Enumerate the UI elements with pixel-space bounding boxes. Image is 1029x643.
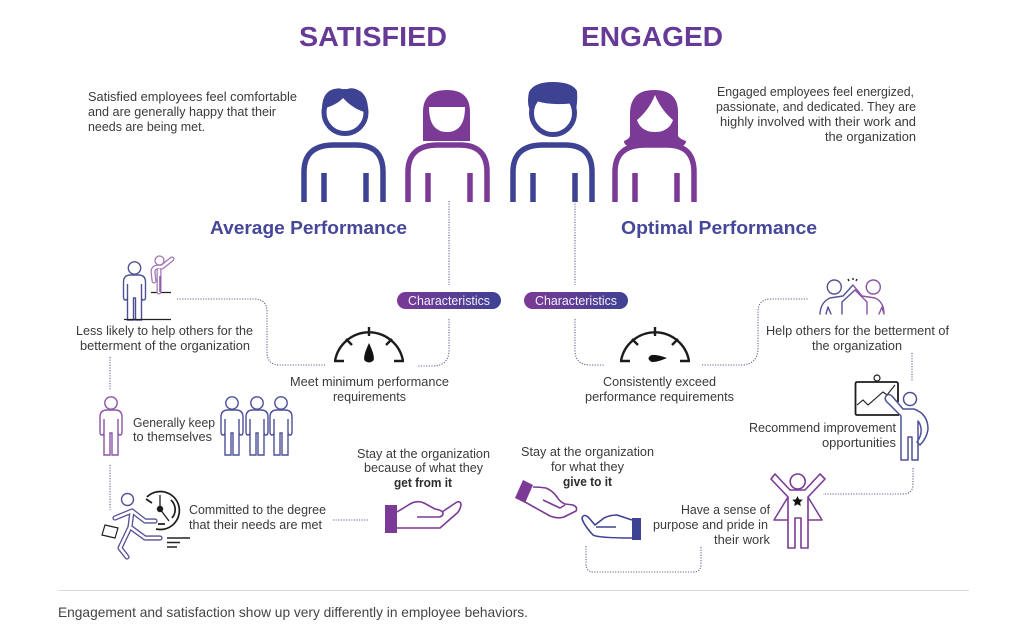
text: stay because of what they get xyxy=(357,447,490,490)
text: recommend improvement: Recommend improvement xyxy=(749,421,897,435)
heading: average performance: Average Performance xyxy=(210,218,407,238)
heading: optimal performance: Optimal Performance xyxy=(621,218,817,238)
icon: group of three people xyxy=(221,397,292,455)
text block: engaged description: highly involved with their work and xyxy=(720,115,916,129)
text block: satisfied description: Satisfied employees feel comfortable xyxy=(88,90,297,104)
icon: satisfied woman xyxy=(408,90,487,202)
text: less likely to help others: Less likely to help others for the xyxy=(76,324,253,338)
text: stay for what they give: give to it xyxy=(563,475,613,489)
text: meet minimum performance: Meet minimum performance xyxy=(290,375,449,389)
text: stay for what they give: Stay at the organization xyxy=(521,445,654,459)
pill: satisfied characteristics xyxy=(397,292,501,309)
text: stay because of what they get: Stay at the organization xyxy=(357,447,490,461)
text: less likely to help others xyxy=(76,324,253,353)
text: sense of purpose: their work xyxy=(714,533,771,547)
text block: satisfied description: needs are being met. xyxy=(88,120,205,134)
text: less likely to help others: betterment of the organization xyxy=(80,339,250,353)
icon: high five xyxy=(820,278,884,314)
text: consistently exceed xyxy=(585,375,734,404)
icon: open hand xyxy=(582,515,641,540)
connector: satisfied person to characteristics xyxy=(448,201,450,285)
text: consistently exceed: Consistently exceed xyxy=(603,375,716,389)
pill: engaged characteristics: Characteristics xyxy=(535,294,617,308)
text block: engaged description: the organization xyxy=(825,130,916,144)
icon: gauge minimum xyxy=(334,327,404,362)
text: help others xyxy=(766,324,950,353)
icon: giving hand xyxy=(515,480,577,518)
text: stay for what they give xyxy=(521,445,654,489)
text: committed to the degree: that their needs are met xyxy=(189,518,323,532)
text block: engaged description xyxy=(716,85,916,144)
text: committed to the degree xyxy=(189,503,326,532)
text: stay because of what they get: get from it xyxy=(394,476,453,490)
connector: left gauge network xyxy=(110,299,449,520)
text: help others: Help others for the betterment of xyxy=(766,324,950,338)
text block: engaged description: Engaged employees feel energized, xyxy=(717,85,914,99)
text: committed to the degree: Committed to the degree xyxy=(189,503,326,517)
icon: superhero with star xyxy=(771,474,825,548)
text: generally keep to themselves: Generally keep xyxy=(133,416,215,430)
caption: Engagement and satisfaction show up very differently in employee behaviors. xyxy=(58,604,528,620)
pill: satisfied characteristics: Characteristics xyxy=(408,294,490,308)
text: stay for what they give: for what they xyxy=(551,460,625,474)
connector: engaged person to characteristics xyxy=(574,201,576,285)
text: meet minimum performance xyxy=(290,375,449,404)
pill: engaged characteristics xyxy=(524,292,628,309)
text: recommend improvement: opportunities xyxy=(822,436,896,450)
icon: running person with clock xyxy=(102,492,190,557)
text: sense of purpose: purpose and pride in xyxy=(653,518,768,532)
text: recommend improvement xyxy=(749,421,897,450)
icon: receiving hand xyxy=(385,502,461,533)
text: stay because of what they get: because of what they xyxy=(364,461,484,475)
title: engaged: ENGAGED xyxy=(581,21,723,52)
text block: satisfied description xyxy=(88,90,297,134)
connector: right gauge network xyxy=(575,299,913,572)
text: sense of purpose: Have a sense of xyxy=(681,503,771,517)
text: sense of purpose xyxy=(653,503,771,547)
icon: engaged woman xyxy=(615,90,694,202)
text: help others: the organization xyxy=(812,339,902,353)
icon: engaged man xyxy=(513,82,592,202)
text: meet minimum performance: requirements xyxy=(333,390,406,404)
title: satisfied: SATISFIED xyxy=(299,21,447,52)
text block: satisfied description: and are generally happy that their xyxy=(88,105,276,119)
icon: lone purple person xyxy=(100,397,122,455)
icon: presenter at board xyxy=(856,375,928,460)
text: consistently exceed: performance requirements xyxy=(585,390,734,404)
text: generally keep to themselves xyxy=(133,416,215,444)
text block: engaged description: passionate, and dedicated. They are xyxy=(716,100,916,114)
icon: person on ground and raised person waving xyxy=(124,256,172,320)
text: generally keep to themselves: to themselves xyxy=(133,430,212,444)
icon: satisfied man xyxy=(304,88,383,202)
icon: gauge exceeding xyxy=(620,327,690,362)
